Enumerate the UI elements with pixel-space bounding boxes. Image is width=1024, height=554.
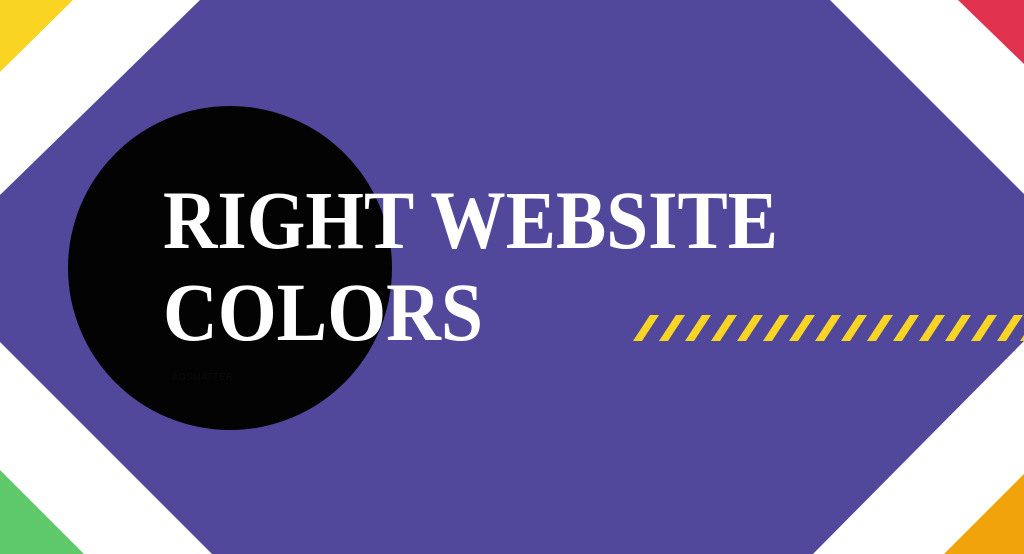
yellow slash stripes (633, 315, 1024, 341)
title (163, 174, 778, 358)
corner: orange (944, 474, 1024, 554)
subtitle (dark on black): ADSMATTER (172, 372, 233, 383)
corner: yellow (0, 0, 73, 72)
title: RIGHT WEBSITE (163, 174, 778, 266)
title: COLORS (163, 266, 483, 358)
black circle (68, 106, 392, 430)
corner: red (958, 0, 1024, 64)
corner: green (0, 470, 84, 554)
